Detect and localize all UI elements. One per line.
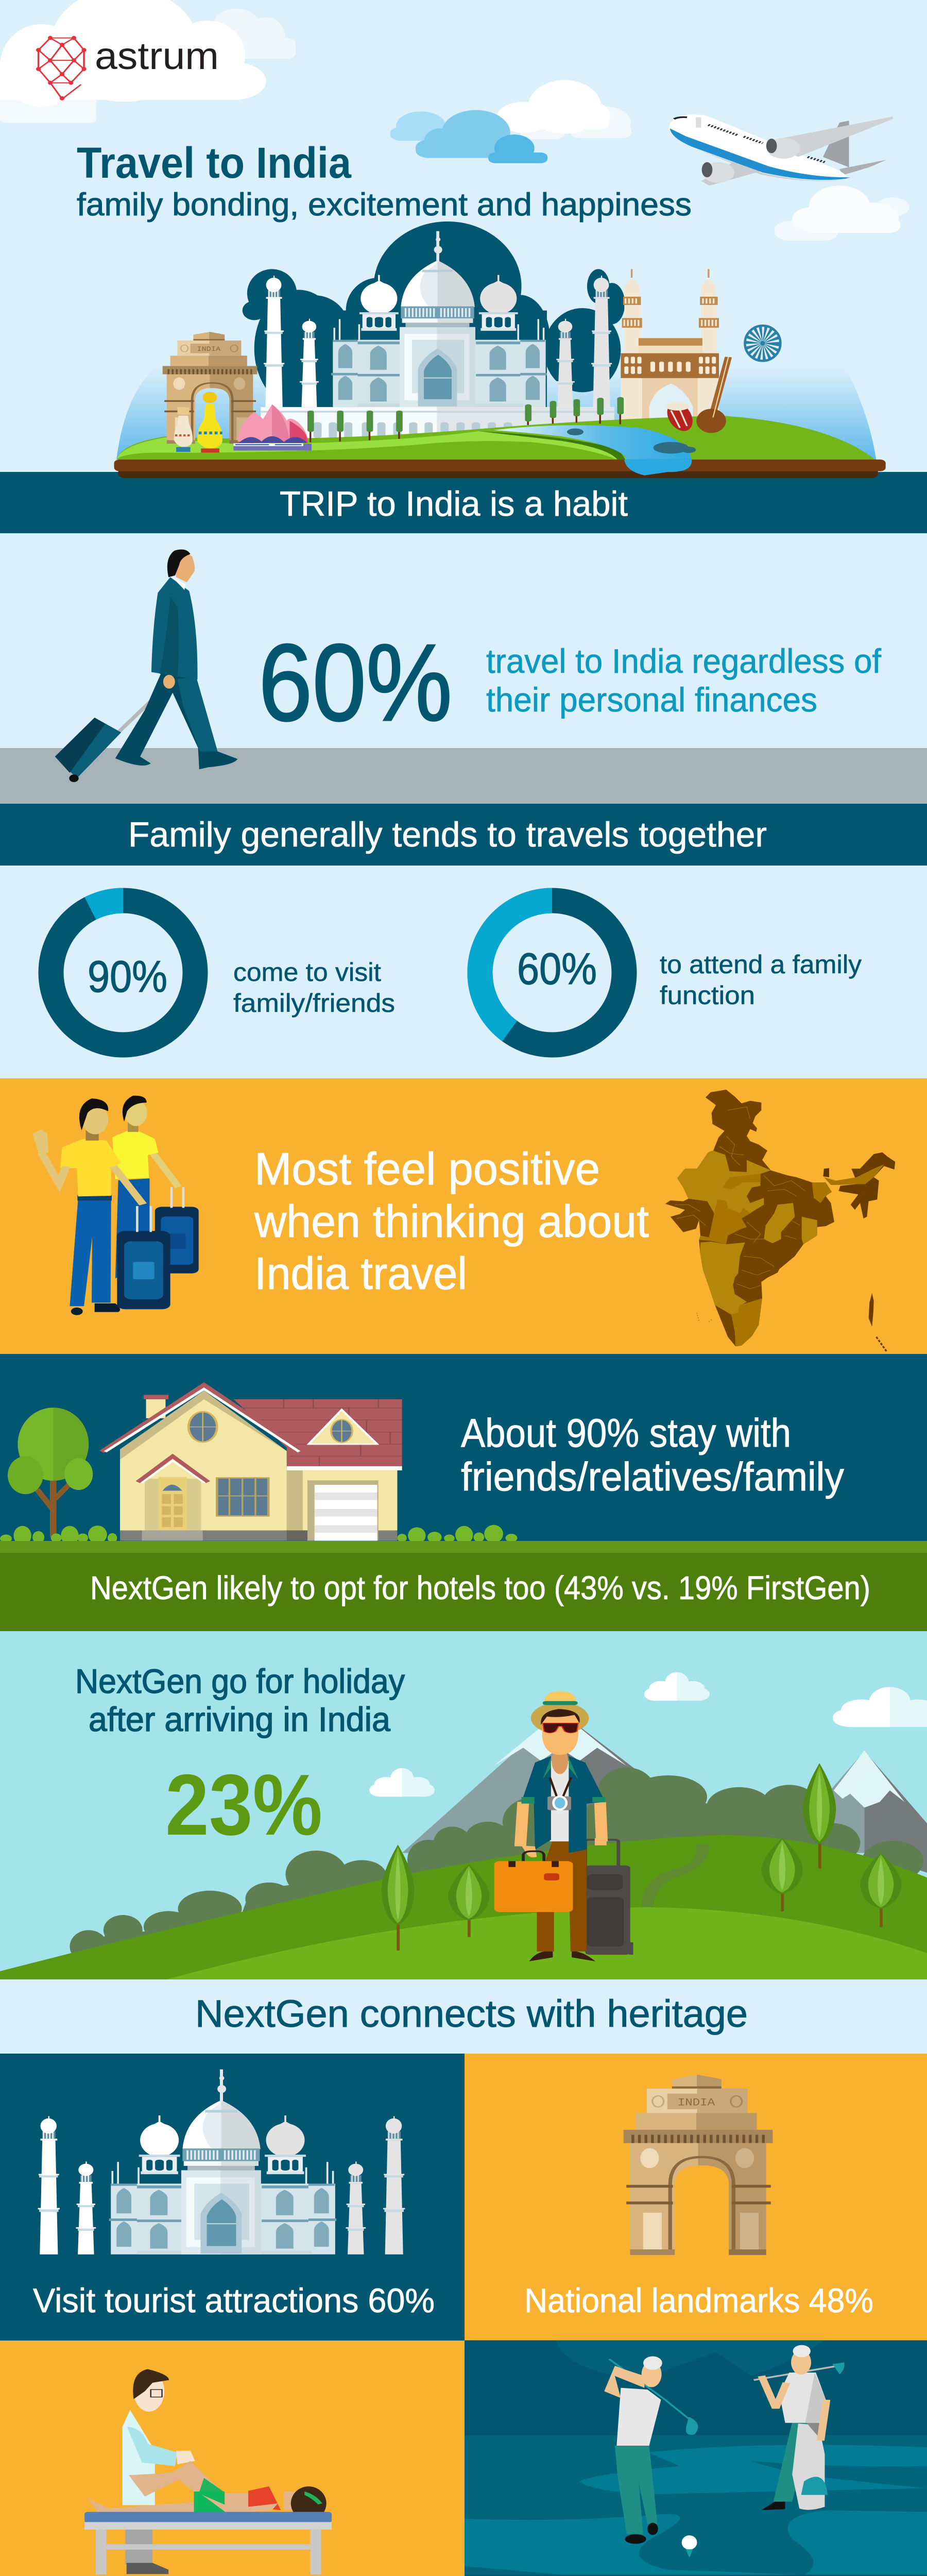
panel background [0, 1078, 927, 1354]
golf course [465, 2340, 927, 2575]
lower wall [261, 407, 614, 442]
panel: hero [0, 0, 927, 533]
panel: holiday after arriving [0, 1631, 927, 1980]
icon: two travellers with luggage [32, 1096, 199, 1315]
landscape with tourist [0, 1672, 927, 1980]
house [101, 1385, 402, 1541]
label: family function [660, 950, 862, 1010]
panel background [0, 1354, 927, 1541]
golf ball [682, 2535, 697, 2557]
sky glow [116, 367, 876, 460]
card: tourist attractions [0, 2054, 465, 2341]
mountains [402, 1711, 927, 1873]
airplane [669, 114, 892, 185]
grass hills [116, 416, 875, 460]
logo cloud [0, 0, 296, 123]
sitar [696, 357, 728, 433]
heading: travel to india: Travel to India [77, 139, 352, 187]
illustration: golfers [465, 2340, 927, 2575]
hills [0, 1835, 927, 1980]
illustration group [32, 1096, 199, 1315]
panel: heritage heading [0, 1979, 927, 2054]
heading: heritage: NextGen connects with heritage [195, 1992, 748, 2035]
bushes [0, 1525, 517, 1545]
donut: 90% [51, 901, 195, 1045]
india gate [163, 332, 257, 444]
text: about 90% [461, 1410, 844, 1499]
donut: 90%: 90% [88, 952, 167, 1002]
urn large [197, 392, 222, 453]
text: nextgen holiday: NextGen go for holiday [75, 1662, 405, 1700]
label: family function: function [660, 981, 755, 1010]
rocks [567, 429, 696, 454]
card background [0, 2054, 465, 2341]
card background [465, 2341, 927, 2576]
taj mahal [264, 231, 612, 407]
hero illustration [0, 0, 909, 241]
icon: taj mahal [38, 2070, 405, 2255]
urn small [174, 407, 193, 452]
heading: family: Family generally tends to travels together [128, 815, 767, 854]
text: personal finances: their personal finances [486, 681, 817, 719]
trees [381, 1763, 902, 1951]
icon: walking businessman with suitcase [55, 550, 237, 782]
chakra [745, 326, 780, 361]
illustration: house and tree [0, 1385, 517, 1545]
tree [8, 1408, 93, 1537]
patient [88, 2461, 327, 2520]
heading band: trip habit [0, 472, 927, 533]
panel: 60% travel regardless [0, 550, 927, 804]
drum [663, 401, 697, 432]
label: tourist attractions: Visit tourist attractions 60% [33, 2281, 435, 2319]
heading band: family [0, 804, 927, 866]
text: about 90%: About 90% stay with [461, 1410, 791, 1455]
clouds [370, 1672, 927, 1797]
trees [307, 397, 624, 442]
label: come to visit [233, 958, 395, 1018]
panel: stay with family [0, 1354, 927, 1545]
golfer right [754, 2345, 845, 2510]
text: most feel positive: India travel [254, 1248, 467, 1299]
charminar [621, 269, 719, 422]
map of india [665, 1090, 895, 1351]
stat: 23%: 23% [165, 1756, 322, 1853]
subheading: family bonding, excitement and happiness [77, 187, 692, 223]
card background [465, 2054, 927, 2341]
text: most feel positive: Most feel positive [254, 1143, 600, 1194]
island base [114, 460, 886, 478]
text: most feel positive [254, 1143, 649, 1299]
massage table [84, 2512, 332, 2574]
tourist [494, 1691, 633, 1961]
monuments island illustration [114, 222, 886, 478]
bushes [70, 1768, 923, 1963]
panel background [0, 1553, 927, 1631]
donut: 60% [480, 901, 624, 1045]
illustration: massage scene [84, 2369, 332, 2574]
label: landmarks: National landmarks 48% [524, 2281, 873, 2319]
river [494, 425, 692, 476]
text: nextgen holiday: after arriving in India [89, 1700, 390, 1738]
panel: nextgen hotels [0, 1541, 927, 1631]
label: family function: to attend a family [660, 950, 862, 979]
taj silhouette [243, 222, 625, 407]
icon: india gate [624, 2075, 772, 2255]
background [0, 1979, 927, 2054]
logo wordmark: astrum [95, 35, 219, 77]
road [0, 748, 927, 804]
text: about 90%: friends/relatives/family [461, 1454, 844, 1499]
panel: family travels together [0, 804, 927, 1045]
therapist [123, 2369, 195, 2574]
card background [0, 2341, 465, 2576]
band heading: trip: TRIP to India is a habit [280, 484, 628, 523]
panel: positive feeling [0, 1078, 927, 1354]
stat: 60%: 60% [259, 621, 452, 743]
text: travel to India: travel to India regardless of [486, 642, 882, 680]
card: playing golf [465, 2340, 927, 2576]
donut: 60%: 60% [517, 944, 597, 994]
card: relax at spas [0, 2341, 465, 2576]
text: most feel positive: when thinking about [254, 1196, 649, 1247]
grass strip [0, 1541, 927, 1553]
golfer left [604, 2356, 698, 2544]
logo icon [36, 36, 87, 100]
lotus temple [233, 404, 312, 450]
sky clouds [390, 80, 909, 241]
card: national landmarks [465, 2054, 927, 2341]
label: come to visit: come to visit [233, 958, 381, 987]
text: nextgen holiday [75, 1662, 405, 1738]
label: come to visit: family/friends [233, 989, 395, 1018]
sky [0, 1631, 927, 1979]
